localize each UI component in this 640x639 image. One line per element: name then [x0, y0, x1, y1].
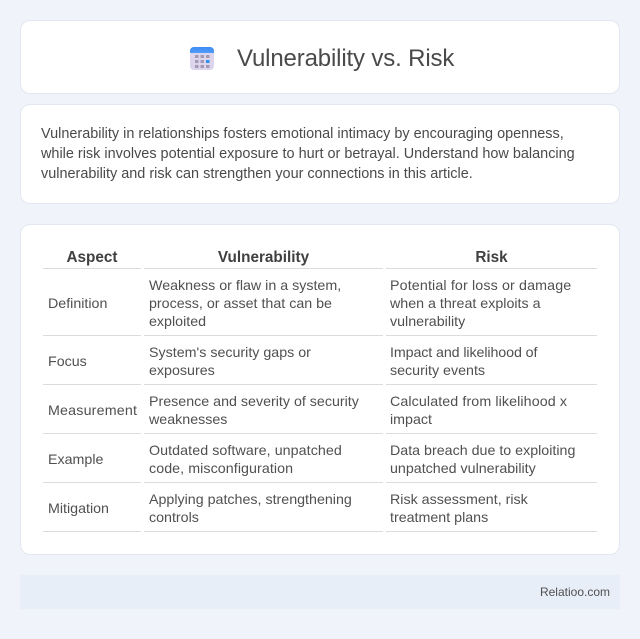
row: Example: code, misconfiguration	[149, 461, 293, 477]
title panel	[20, 20, 620, 94]
row: Focus: System's security gaps or	[149, 345, 311, 361]
row: Focus: security events	[390, 363, 485, 379]
row: Measurement: Presence and severity of security	[149, 394, 359, 410]
row: Definition: Potential for loss or damage	[390, 278, 571, 294]
row: Definition: process, or asset that can be	[149, 296, 332, 312]
intro text: Vulnerability in relationships fosters emotional intimacy by encouraging openness,	[41, 126, 564, 142]
row: Definition: vulnerability	[390, 314, 465, 330]
row: Example: unpatched vulnerability	[390, 461, 536, 477]
footer bar	[20, 575, 620, 609]
row: Measurement: Calculated from likelihood x	[390, 394, 567, 410]
row: Focus: Impact and likelihood of	[390, 345, 537, 361]
row: Mitigation: controls	[149, 510, 199, 526]
row: Definition: Weakness or flaw in a system,	[149, 278, 341, 294]
title: Vulnerability vs. Risk	[237, 45, 454, 72]
row: Mitigation: Mitigation	[48, 501, 109, 517]
row: Mitigation	[48, 492, 528, 526]
intro text: while risk involves potential exposure to hurt or betrayal. Understand how balancing	[41, 146, 575, 162]
footer text: Relatioo.com	[540, 585, 610, 599]
row: Mitigation: treatment plans	[390, 510, 488, 526]
header: Vulnerability: Vulnerability	[218, 249, 309, 266]
row: Example: Outdated software, unpatched	[149, 443, 342, 459]
row: Focus: exposures	[149, 363, 215, 379]
row: Example: Example	[48, 452, 103, 468]
row: Definition: when a threat exploits a	[390, 296, 541, 312]
row: Definition	[48, 278, 571, 330]
intro panel	[20, 104, 620, 204]
row: Focus: Focus	[48, 354, 87, 370]
row: Measurement: weaknesses	[149, 412, 227, 428]
icon: calendar	[190, 47, 214, 70]
header: Risk: Risk	[475, 249, 508, 266]
row: Mitigation: Risk assessment, risk	[390, 492, 528, 508]
row: Mitigation: Applying patches, strengthening	[149, 492, 352, 508]
row: Example	[48, 443, 575, 477]
table panel	[20, 224, 620, 555]
row: Measurement	[48, 394, 567, 428]
header: Aspect: Aspect	[66, 249, 118, 266]
intro text: vulnerability and risk can strengthen your connections in this article.	[41, 166, 473, 182]
row: Measurement: Measurement	[48, 403, 137, 419]
intro text	[41, 126, 575, 182]
row: Definition: Definition	[48, 296, 107, 312]
row: Example: Data breach due to exploiting	[390, 443, 575, 459]
row: Focus	[48, 345, 538, 379]
row: Definition: exploited	[149, 314, 206, 330]
row: Measurement: impact	[390, 412, 432, 428]
